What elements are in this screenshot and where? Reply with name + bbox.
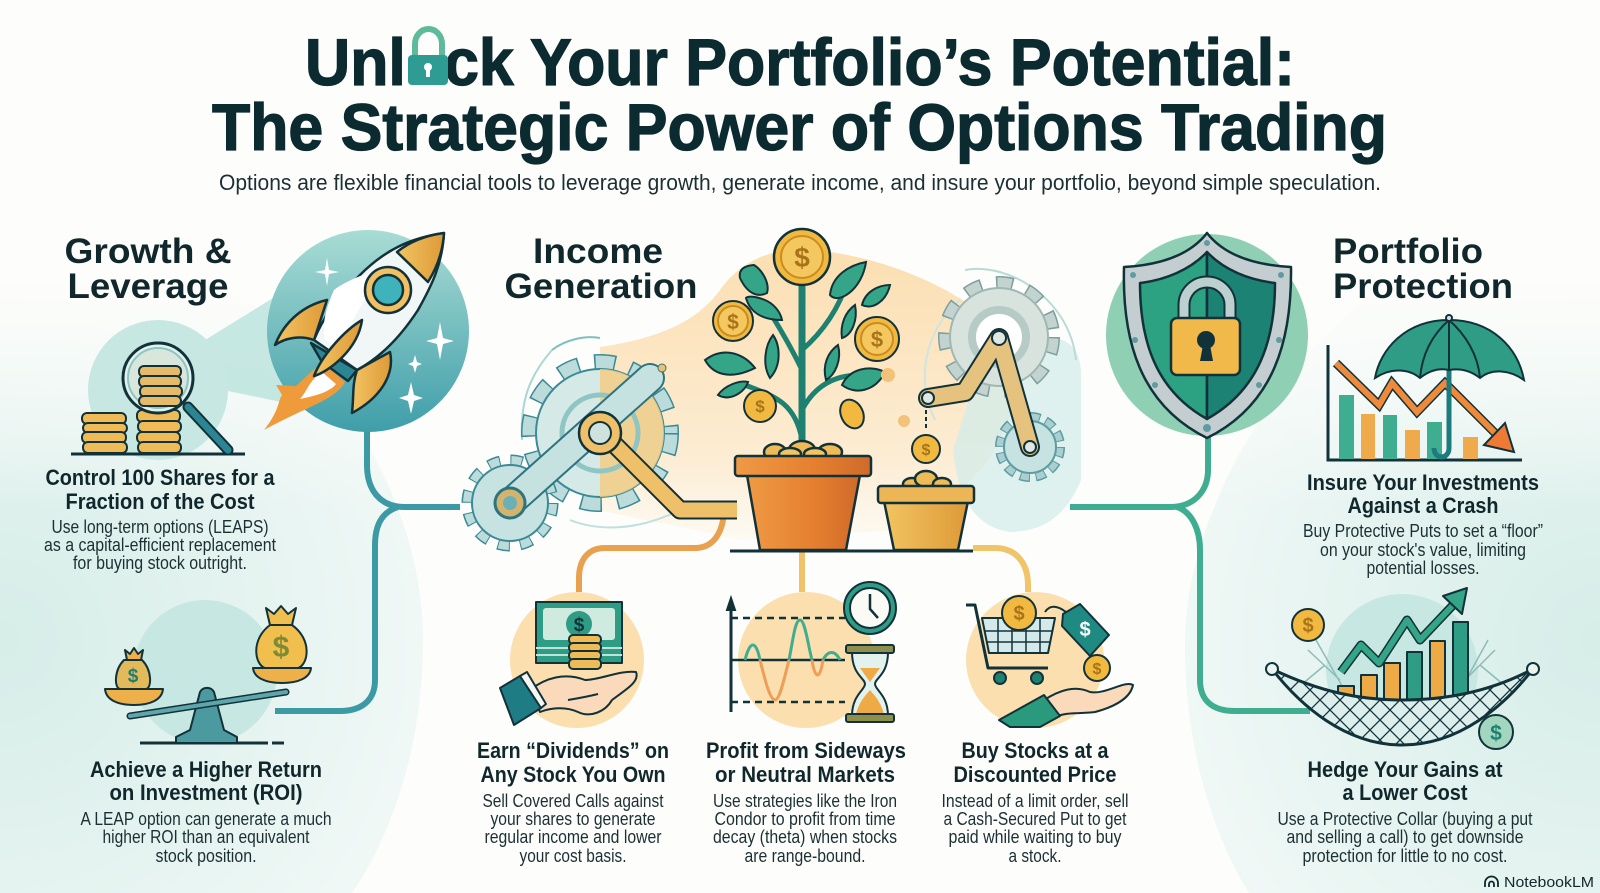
heading: protection [1333, 232, 1513, 306]
text: discounted price: paid while waiting to buy [948, 827, 1122, 847]
text: hedge gains: Hedge Your Gains at [1308, 757, 1503, 782]
connector: income orange [579, 513, 724, 592]
small gear [468, 461, 552, 545]
text: higher ROI: A LEAP option can generate a much [80, 809, 332, 829]
icon: cart, tag and hand: $ [1013, 603, 1025, 625]
text: hedge gains [1278, 757, 1532, 866]
text: dividends: Sell Covered Calls against [482, 791, 664, 811]
icon: money tree [705, 229, 910, 460]
text: control 100 shares: as a capital-efficient replacement [44, 535, 276, 555]
text: dividends: your cost basis. [520, 846, 626, 866]
icon: range chart, clock and hourglass [727, 582, 896, 728]
title [212, 25, 1387, 164]
text: insure investments [1303, 470, 1543, 578]
text: sideways markets [706, 738, 906, 866]
central peach blob [600, 250, 1015, 540]
title: The Strategic Power of Options Trading [212, 90, 1387, 164]
top coin: $ [794, 242, 810, 273]
icon: umbrella over falling chart [1328, 315, 1524, 460]
text: discounted price: a stock. [1008, 846, 1062, 866]
icon: right gears, arm, small pot: $ [922, 442, 931, 459]
text: dividends: regular income and lower [484, 827, 662, 847]
text: control 100 shares: Fraction of the Cost [66, 489, 255, 514]
text: insure investments: Insure Your Investments [1307, 470, 1539, 495]
text: higher ROI: stock position. [156, 846, 256, 866]
text: discounted price [942, 738, 1128, 866]
coin [744, 390, 776, 422]
heading: protection: Protection [1333, 267, 1513, 306]
text: discounted price: Buy Stocks at a [962, 738, 1109, 763]
top coin [774, 229, 830, 285]
heading: income: Generation [504, 267, 698, 306]
icon: left gears and crank [468, 337, 737, 545]
shelf line [730, 550, 973, 552]
icon: rocket [264, 230, 469, 432]
icon: cash and hand [500, 592, 644, 728]
icon: balance scale with money bags: $ [273, 631, 290, 664]
text: sideways markets: or Neutral Markets [715, 762, 895, 787]
icon: safety net with rising chart [1266, 588, 1539, 749]
coin [713, 301, 753, 341]
coin [855, 317, 899, 361]
icon: cart, tag and hand [966, 592, 1133, 728]
text: insure investments: on your stock's value, limiting [1320, 540, 1526, 560]
text: discounted price: a Cash-Secured Put to get [944, 809, 1126, 829]
text: hedge gains: a Lower Cost [1342, 780, 1468, 805]
text: control 100 shares: for buying stock outright. [73, 553, 247, 573]
icon: title padlock [408, 29, 448, 85]
coin: $ [755, 397, 765, 416]
text: discounted price: Instead of a limit order, sell [942, 791, 1128, 811]
text: sideways markets: Use strategies like the Iron [713, 791, 897, 811]
text: higher ROI: Achieve a Higher Return [90, 757, 322, 782]
icon: balance scale with money bags: $ [128, 666, 139, 687]
text: hedge gains: protection for little to no cost. [1302, 846, 1508, 866]
text: control 100 shares: Control 100 Shares for a [46, 465, 275, 490]
text: dividends: your shares to generate [490, 809, 656, 829]
icon: balance scale with money bags [105, 600, 311, 744]
big gear [530, 363, 670, 503]
text: dividends: Earn “Dividends” on [477, 738, 669, 763]
text: control 100 shares [44, 465, 276, 573]
text: hedge gains: Use a Protective Collar (buying a put [1278, 809, 1532, 829]
connector: protection green [1070, 435, 1310, 711]
text: insure investments: Against a Crash [1348, 493, 1498, 518]
icon: cart, tag and hand: $ [1093, 661, 1102, 678]
text: sideways markets: decay (theta) when stocks [713, 827, 897, 847]
icon: safety net with rising chart: $ [1302, 615, 1314, 637]
text: higher ROI [80, 757, 332, 866]
text: sideways markets: Condor to profit from time [714, 809, 896, 829]
text: control 100 shares: Use long-term options (LEAPS) [52, 517, 268, 537]
text: sideways markets: are range-bound. [744, 846, 866, 866]
text: higher ROI: on Investment (ROI) [110, 780, 302, 805]
title: Unlock Your Portfolio’s Potential: [305, 25, 1295, 99]
connector: income right [973, 548, 1028, 592]
text: hedge gains: and selling a call) to get downside [1286, 827, 1524, 847]
icon: magnifier and coins [71, 320, 245, 460]
heading: growth: Leverage [68, 267, 228, 306]
coin: $ [727, 311, 739, 334]
heading: growth: Growth & [64, 232, 232, 271]
coin: $ [871, 327, 883, 352]
text: insure investments: potential losses. [1366, 558, 1480, 578]
text: higher ROI: higher ROI than an equivalent [102, 827, 310, 847]
icon: right gears, arm, small pot [878, 269, 1081, 550]
subtitle: Options are flexible financial tools to leverage growth, generate income, and insure your portfolio, beyond simple speculation. [219, 170, 1381, 195]
heading: income: Income [533, 232, 663, 271]
icon: magnifier beam [184, 298, 286, 403]
connector: growth teal [275, 430, 460, 711]
icon: cash and hand: $ [574, 615, 585, 636]
heading: protection: Portfolio [1333, 232, 1483, 271]
text: dividends: Any Stock You Own [480, 762, 666, 787]
text: discounted price: Discounted Price [954, 762, 1116, 787]
icon: safety net with rising chart: $ [1490, 722, 1502, 745]
icon: shield [1106, 233, 1308, 438]
heading: growth [64, 232, 232, 306]
icon: cart, tag and hand: $ [1079, 619, 1091, 641]
text: insure investments: Buy Protective Puts to set a “floor” [1303, 521, 1543, 541]
text: sideways markets: Profit from Sideways [706, 738, 906, 763]
connector: income middle [799, 552, 805, 592]
watermark: NotebookLM: NotebookLM [1504, 874, 1594, 891]
text: dividends [477, 738, 669, 866]
heading: income [504, 232, 698, 306]
background washes [0, 180, 1600, 893]
icon: large orange pot [735, 441, 871, 550]
